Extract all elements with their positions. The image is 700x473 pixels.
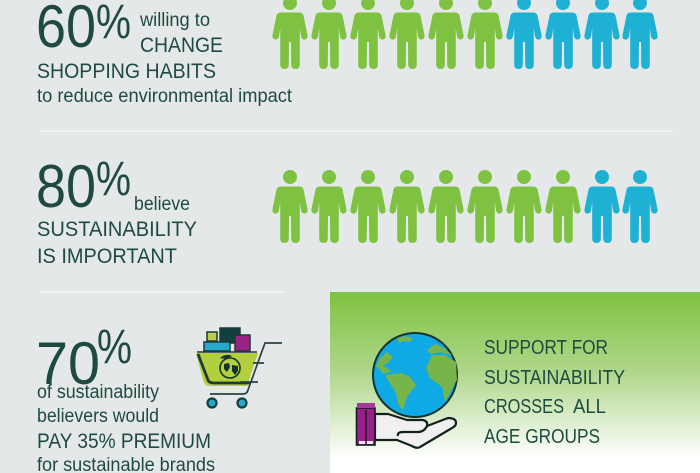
section: 60 percent statistic: CHANGE xyxy=(140,34,223,57)
section: 60 percent statistic: SHOPPING HABITS xyxy=(37,60,216,83)
section: 80 percent statistic xyxy=(36,153,197,268)
panel: age groups xyxy=(330,292,700,473)
icon: hand holding globe xyxy=(356,333,457,448)
section: 70 percent statistic: % xyxy=(97,321,132,374)
pictogram: 8 of 10 people green xyxy=(272,170,658,243)
section: 70 percent statistic: 70 xyxy=(36,330,100,397)
section: 80 percent statistic: % xyxy=(96,153,131,206)
text: support crosses all age groups: SUPPORT FOR xyxy=(484,337,608,359)
text: support crosses all age groups: AGE GROUPS xyxy=(484,426,600,448)
text: support crosses all age groups xyxy=(484,337,625,448)
section: 70 percent statistic: believers would xyxy=(37,406,159,427)
section: 60 percent statistic: willing to xyxy=(139,10,210,31)
section: 80 percent statistic: IS IMPORTANT xyxy=(37,245,177,268)
text: support crosses all age groups: ALL xyxy=(573,396,606,418)
section: 70 percent statistic: of sustainability xyxy=(37,382,159,403)
section: 60 percent statistic xyxy=(36,0,293,107)
pictogram: 6 of 10 people green xyxy=(272,0,658,69)
icon: shopping cart with globe xyxy=(195,328,282,408)
section: 80 percent statistic: SUSTAINABILITY xyxy=(37,218,197,241)
section: 80 percent statistic: believe xyxy=(134,194,190,215)
section: 60 percent statistic: to reduce environmental impact xyxy=(37,86,293,107)
text: support crosses all age groups: CROSSES xyxy=(484,396,564,418)
text: support crosses all age groups: SUSTAINABILITY xyxy=(484,367,625,389)
section: 80 percent statistic: 80 xyxy=(36,153,96,220)
section: 70 percent statistic: PAY 35% PREMIUM xyxy=(37,430,211,453)
section: 70 percent statistic xyxy=(36,321,215,473)
